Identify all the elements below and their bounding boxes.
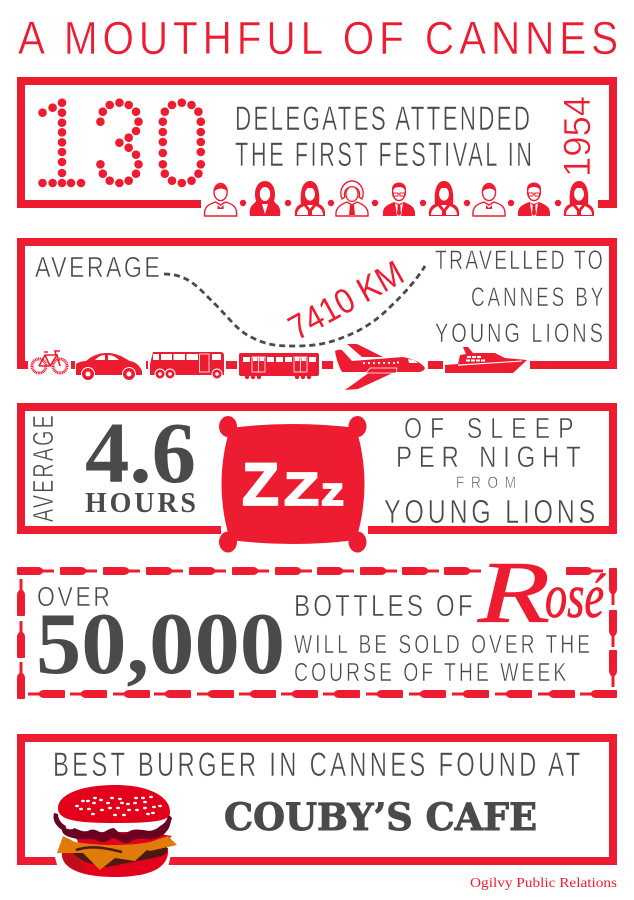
- zzz lettering: Z: [284, 463, 319, 515]
- average label: AVERAGE: [35, 250, 160, 284]
- zzz lettering: Z: [242, 451, 279, 518]
- dotted number 130: [38, 98, 205, 187]
- icon: burger: [53, 785, 177, 877]
- week text: WILL BE SOLD OVER THE: [294, 629, 590, 659]
- burger heading: BEST BURGER IN CANNES FOUND AT: [53, 746, 580, 784]
- panel: delegates: [21, 81, 613, 216]
- rotated average label: AVERAGE: [28, 415, 60, 522]
- panel: delegates: THE FIRST FESTIVAL IN: [235, 136, 532, 174]
- zzz lettering: [242, 451, 344, 518]
- panel: distance travelled: YOUNG LIONS: [435, 318, 603, 349]
- rose script: R: [477, 545, 550, 642]
- hours label: HOURS: [85, 488, 196, 519]
- panel: distance travelled: CANNES BY: [471, 282, 604, 312]
- icon: train: [239, 353, 319, 379]
- rose script: osé: [545, 563, 606, 631]
- icon: pillow: [219, 416, 366, 552]
- dashed route line: [164, 266, 425, 346]
- icon: yacht: [445, 347, 527, 373]
- panel: burger: [21, 738, 613, 877]
- title: A MOUTHFUL OF CANNES: [18, 14, 618, 65]
- bottles of text: BOTTLES OF: [294, 588, 473, 623]
- panel: sleep: YOUNG LIONS: [384, 494, 595, 531]
- row of delegates icons: [204, 181, 594, 216]
- panel: sleep: PER NIGHT: [396, 439, 581, 474]
- number 4.6: 4.6: [85, 404, 196, 501]
- year 1954: 1954: [557, 96, 599, 177]
- cafe name: COUBY’S CAFE: [224, 795, 537, 839]
- delegates text: DELEGATES ATTENDED: [235, 100, 530, 138]
- panel: sleep: FROM: [456, 474, 516, 492]
- icon: bus: [150, 352, 224, 379]
- icon: plane: [335, 344, 425, 390]
- panel: distance travelled: [21, 242, 613, 390]
- rose script: [477, 545, 606, 642]
- footer credit: Ogilvy Public Relations: [470, 875, 617, 890]
- over label: OVER: [37, 582, 110, 613]
- icon: bicycle: [32, 351, 67, 373]
- number 50,000: 50,000: [36, 596, 285, 693]
- panel: sleep: [21, 404, 613, 552]
- panel: rose bottles: [17, 545, 617, 699]
- zzz lettering: z: [321, 470, 344, 514]
- panel: rose bottles: COURSE OF THE WEEK: [294, 657, 567, 687]
- icon: car: [76, 353, 142, 380]
- distance 7410 km: 7410 KM: [282, 253, 410, 348]
- bottle dashed border: [17, 567, 617, 699]
- travelled text: TRAVELLED TO: [435, 245, 603, 275]
- sleep text: OF SLEEP: [404, 411, 574, 445]
